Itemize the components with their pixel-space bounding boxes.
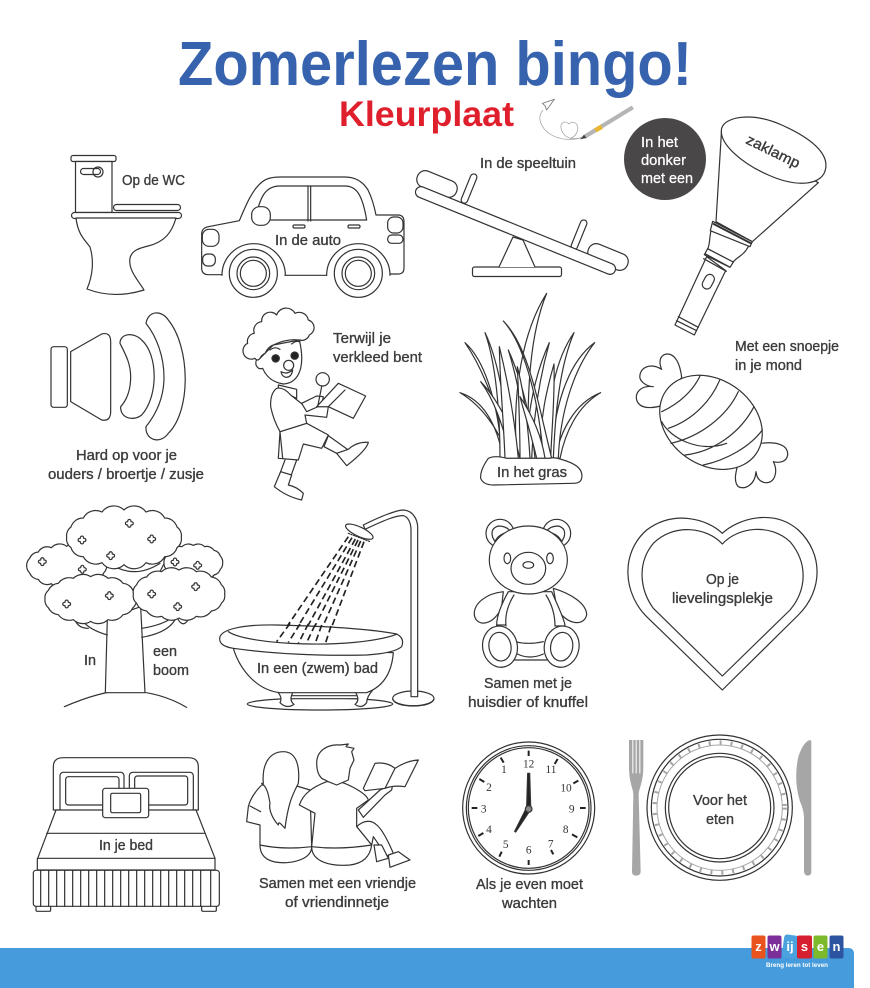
item: voor het eten: eten xyxy=(706,812,734,828)
item: in een boom: boom xyxy=(153,663,189,679)
icon: bath and shower xyxy=(220,510,434,710)
icon: clock: 9 xyxy=(569,803,575,815)
logo: zwijsen: w xyxy=(768,939,780,954)
label: Samen met een vriendje xyxy=(259,876,416,892)
icon: clock xyxy=(463,742,595,874)
icon: clock: 5 xyxy=(503,839,509,851)
item: in de speeltuin xyxy=(414,156,631,276)
icon: plate and cutlery xyxy=(629,735,811,880)
icon: clock: 2 xyxy=(486,782,492,794)
icon: grass xyxy=(460,293,601,485)
item: in een bad xyxy=(220,510,434,710)
item: in een boom: een xyxy=(153,644,177,660)
icon: clock: 4 xyxy=(486,824,492,836)
icon: car xyxy=(202,177,404,297)
item: snoepje xyxy=(636,339,839,489)
item: in je bed xyxy=(33,758,219,911)
icon: heart xyxy=(628,517,817,690)
logo: zwijsen xyxy=(752,934,844,969)
icon: candy xyxy=(636,354,788,489)
item: wachten: wachten xyxy=(501,896,557,912)
label: In de speeltuin xyxy=(480,156,576,172)
icon: clock: 6 xyxy=(526,845,532,857)
item: lievelingsplekje: lievelingsplekje xyxy=(672,591,773,607)
item: in een boom xyxy=(27,506,225,707)
subtitle: Kleurplaat xyxy=(339,95,514,134)
label: In het gras xyxy=(497,465,567,481)
item: knuffel xyxy=(468,519,588,711)
logo: zwijsen: ij xyxy=(786,939,794,954)
title: Zomerlezen bingo! xyxy=(178,30,692,99)
label: Hard op voor je xyxy=(76,448,177,464)
item: hard op voor: ouders / broertje / zusje xyxy=(48,467,204,483)
label: In xyxy=(84,653,96,669)
icon: flashlight xyxy=(675,117,826,335)
icon: seesaw xyxy=(414,168,631,276)
icon: boy with book xyxy=(243,308,368,500)
icon: pencil and paper plane xyxy=(540,99,634,139)
logo: zwijsen: e xyxy=(817,939,824,954)
logo: zwijsen: s xyxy=(801,939,808,954)
label: Terwijl je xyxy=(333,331,391,347)
icon: speaker xyxy=(51,313,185,440)
callout: in het donker met een: donker xyxy=(641,153,686,169)
logo: zwijsen: Breng leren tot leven xyxy=(766,963,828,969)
item: op de WC xyxy=(71,156,185,294)
logo: zwijsen: z xyxy=(755,939,762,954)
icon: clock: 11 xyxy=(546,764,556,776)
icon: clock: 3 xyxy=(481,803,487,815)
label: Samen met je xyxy=(484,676,572,692)
callout: in het donker met een: In het xyxy=(641,135,678,151)
label: In een (zwem) bad xyxy=(257,661,378,677)
item: samen met vriendje: of vriendinnetje xyxy=(285,895,389,911)
label: Op de WC xyxy=(122,173,185,189)
item: voor het eten xyxy=(629,735,811,880)
icon: tree xyxy=(27,506,225,707)
item: wachten xyxy=(463,742,595,912)
item: snoepje: in je mond xyxy=(735,358,802,374)
footer bar xyxy=(0,948,854,988)
icon: clock: 12 xyxy=(523,759,535,771)
callout: in het donker met een xyxy=(624,118,706,200)
label: Voor het xyxy=(693,793,747,809)
label: Op je xyxy=(706,572,739,588)
item: lievelingsplekje xyxy=(628,517,817,690)
icon: clock: 1 xyxy=(501,764,507,776)
callout: in het donker met een: met een xyxy=(641,171,693,187)
item: in de auto xyxy=(202,177,404,297)
item: hard op voor xyxy=(48,313,204,483)
icon: clock: 10 xyxy=(560,782,572,794)
label: In je bed xyxy=(99,838,153,854)
label: Met een snoepje xyxy=(735,339,839,355)
label: In de auto xyxy=(275,233,341,249)
icon: two friends reading xyxy=(247,744,418,867)
icon: toilet xyxy=(71,156,182,294)
icon: bed xyxy=(33,758,219,911)
item: verkleed xyxy=(243,308,422,500)
icon: teddy bear xyxy=(474,519,587,670)
item: in het gras xyxy=(460,293,601,485)
item: samen met vriendje xyxy=(247,744,418,911)
logo: zwijsen: n xyxy=(833,939,841,954)
item: knuffel: huisdier of knuffel xyxy=(468,695,588,711)
icon: clock: 7 xyxy=(548,839,554,851)
label: zaklamp xyxy=(743,132,802,172)
label: Als je even moet xyxy=(476,877,583,893)
icon: clock: 8 xyxy=(563,824,569,836)
item: verkleed: verkleed bent xyxy=(333,350,422,366)
item: zaklamp xyxy=(624,117,826,335)
